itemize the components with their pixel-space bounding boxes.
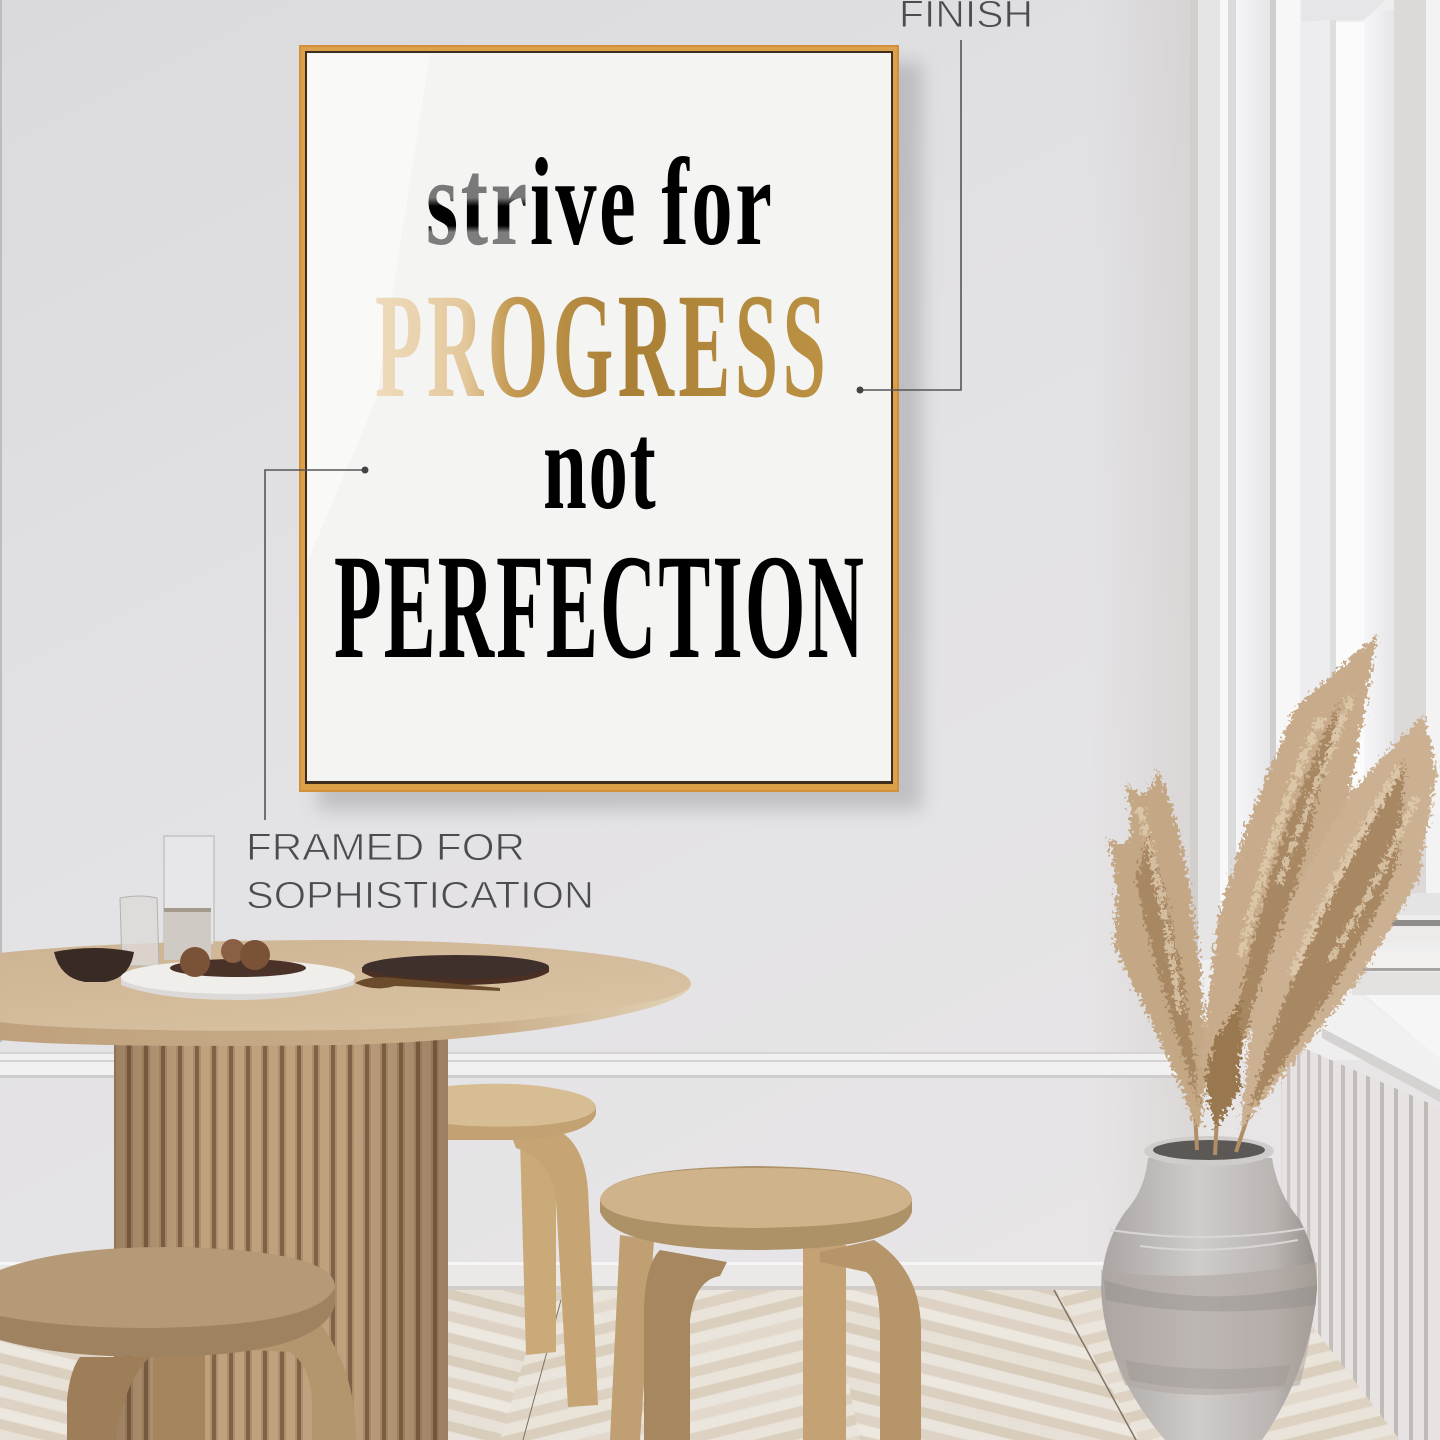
tumbler	[120, 896, 159, 966]
text: not: not	[543, 397, 656, 536]
front right stool	[600, 1166, 921, 1440]
callout: finish	[856, 0, 1033, 394]
callout: framed for sophistication: SOPHISTICATION	[246, 875, 594, 917]
tableware	[54, 836, 549, 1000]
text: strive for: strive for	[426, 133, 772, 271]
dark plate	[362, 955, 549, 985]
table top	[0, 940, 691, 1046]
pampas grass	[1108, 634, 1437, 1155]
stems	[1194, 1090, 1250, 1155]
stool seat	[0, 1247, 335, 1357]
framed artwork	[299, 45, 899, 792]
plume highlights	[1140, 700, 1415, 1010]
chair rail and baseboard	[0, 1052, 1180, 1290]
nuts	[170, 939, 306, 977]
callout: framed for sophistication	[246, 466, 594, 917]
back stool	[448, 1084, 598, 1407]
window frame and reveals	[1190, 0, 1440, 1060]
stool legs	[67, 1357, 150, 1440]
artwork frame shadow	[318, 62, 922, 810]
text: PROGRESS: PROGRESS	[375, 262, 826, 429]
callout: framed for sophistication: FRAMED FOR	[246, 827, 525, 869]
spoon	[355, 977, 500, 991]
vase	[1101, 1136, 1317, 1440]
herringbone floor	[0, 1290, 1420, 1440]
text: PERFECTION: PERFECTION	[334, 523, 864, 690]
stool seat	[600, 1166, 912, 1250]
bowl	[54, 948, 134, 982]
window sill with books	[1322, 920, 1440, 1102]
radiator	[1281, 1048, 1428, 1440]
carafe	[164, 836, 214, 960]
front left stool	[0, 1247, 356, 1440]
marble board	[121, 960, 355, 1000]
plumes	[1108, 634, 1437, 1129]
stool legs	[610, 1235, 654, 1440]
table pedestal	[114, 1035, 448, 1440]
